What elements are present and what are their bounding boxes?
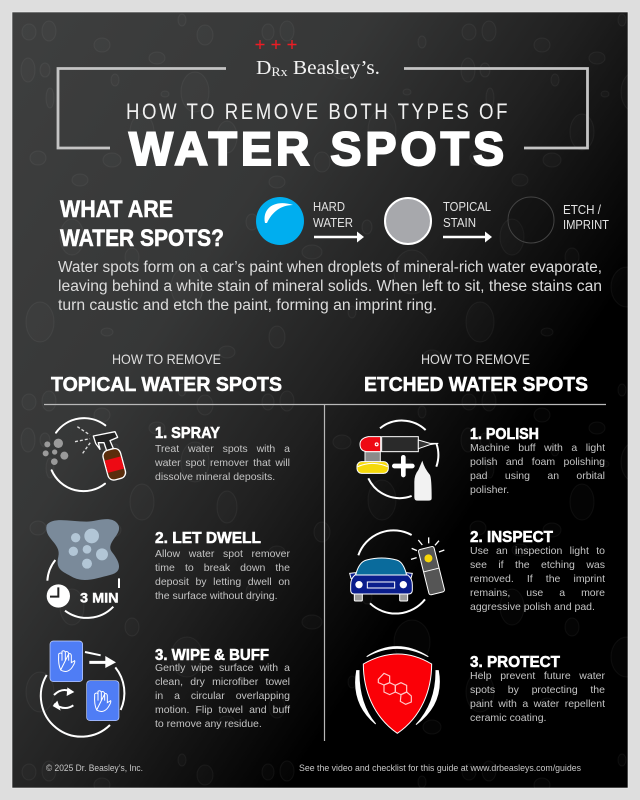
title bracket frame	[58, 68, 588, 148]
icon: polisher and polish bottle	[357, 421, 438, 501]
column heading: topical: HOW TO REMOVE	[112, 351, 221, 367]
step 1 spray text: dissolve mineral deposits.	[155, 471, 275, 483]
step 3 wipe and buff text: to remove any residue.	[155, 718, 262, 730]
step 2 dwell text: deposit by letting dwell on	[155, 576, 290, 588]
icon: topical stain	[385, 198, 431, 244]
label: hard water	[313, 199, 353, 230]
logo red crosses	[256, 40, 296, 49]
heading: what are water spots: WHAT ARE	[60, 196, 173, 223]
step 1 polish text	[470, 442, 605, 496]
step 1 polish text: polish and foam polishing	[470, 456, 605, 468]
step 3 protect text	[470, 670, 605, 724]
logo: Dr. Beasley's	[256, 40, 380, 79]
logo wordmark: D	[256, 57, 270, 79]
column heading: topical: TOPICAL WATER SPOTS	[51, 373, 282, 396]
step 2 inspect text: removed. If the imprint	[470, 573, 605, 585]
column heading: etched: ETCHED WATER SPOTS	[364, 373, 588, 396]
column heading: topical	[51, 351, 282, 396]
intro paragraph: leaving behind a white stain of mineral solids. When left to sit, these stains can	[58, 278, 602, 295]
label: etch imprint: IMPRINT	[563, 217, 609, 232]
step 2 inspect text: see if the etching was	[470, 559, 605, 571]
icon: etch imprint	[508, 197, 554, 243]
label: topical stain: STAIN	[443, 215, 476, 230]
title line 2: WATER SPOTS	[129, 122, 508, 175]
step 3 protect heading: 3. PROTECT	[470, 654, 560, 671]
step 1 polish heading: 1. POLISH	[470, 426, 539, 443]
step 3 protect text: Help prevent future water	[470, 670, 605, 682]
step 3 wipe and buff text: clean, dry microfiber towel	[155, 676, 290, 688]
icon: dwell stain with timer: 3 MIN	[80, 589, 119, 605]
label: topical stain	[443, 199, 491, 230]
step 2 inspect text	[470, 545, 605, 613]
icon: dwell stain with timer	[46, 519, 119, 618]
step 3 wipe and buff text: in a circular overlapping	[155, 690, 290, 702]
icon: spray bottle	[43, 418, 127, 491]
label: topical stain: TOPICAL	[443, 199, 491, 214]
step 1 polish text: pad using an orbital	[470, 470, 605, 482]
step 1 spray text: Treat water spots with a	[155, 443, 290, 455]
icon: hard water droplet	[256, 197, 304, 245]
intro paragraph	[58, 259, 602, 314]
logo wordmark: Beasley’s.	[288, 57, 380, 79]
step 3 wipe and buff text: Gently wipe surface with a	[155, 662, 290, 674]
step 2 dwell text: time to break down the	[155, 562, 290, 574]
label: etch imprint	[563, 202, 609, 232]
step 3 wipe and buff text	[155, 662, 290, 730]
arrow: hard water to stain	[314, 232, 364, 242]
label: etch imprint: ETCH /	[563, 202, 601, 217]
heading: what are water spots: WATER SPOTS?	[60, 225, 224, 252]
step 3 wipe and buff text: motion. Flip towel and buff	[155, 704, 290, 716]
step 3 protect text: spots by protecting the	[470, 684, 605, 696]
step 3 protect text: paint with a water repellent	[470, 698, 605, 710]
logo wordmark: Rx	[271, 64, 288, 79]
step 2 dwell text: Allow water spot remover	[155, 548, 290, 560]
heading: what are water spots	[60, 196, 224, 252]
footer copyright: © 2025 Dr. Beasley’s, Inc.	[46, 763, 143, 773]
step 2 dwell text: the surface without drying.	[155, 590, 278, 602]
intro paragraph: Water spots form on a car’s paint when droplets of mineral-rich water evaporate,	[58, 259, 602, 276]
step 2 inspect heading: 2. INSPECT	[470, 529, 553, 546]
intro paragraph: turn caustic and etch the paint, forming an imprint ring.	[58, 297, 437, 314]
arrow: stain to etch	[443, 232, 492, 242]
step 3 protect text: ceramic coating.	[470, 712, 546, 724]
step 1 polish text: Machine buff with a light	[470, 442, 605, 454]
step 1 spray text: water spot remover that will	[155, 457, 290, 469]
step 2 inspect text: remains, use a more	[470, 587, 605, 599]
step 1 spray heading: 1. SPRAY	[155, 425, 220, 442]
column heading: etched	[364, 351, 588, 396]
step 1 spray text	[155, 443, 290, 483]
label: hard water: WATER	[313, 215, 353, 230]
step 2 inspect text: aggressive polish and pad.	[470, 601, 595, 613]
title line 1: HOW TO REMOVE BOTH TYPES OF	[126, 99, 510, 124]
label: hard water: HARD	[313, 199, 345, 214]
step 2 inspect text: Use an inspection light to	[470, 545, 605, 557]
step 2 dwell text	[155, 548, 290, 602]
step 1 polish text: polisher.	[470, 484, 509, 496]
icon: ceramic shield	[356, 647, 439, 733]
step 2 dwell heading: 2. LET DWELL	[155, 530, 261, 547]
column heading: etched: HOW TO REMOVE	[421, 351, 530, 367]
icon: wipe and buff hands	[41, 641, 124, 737]
step 3 wipe and buff heading: 3. WIPE & BUFF	[155, 647, 269, 664]
footer guide link: See the video and checklist for this guide at www.drbeasleys.com/guides	[299, 763, 581, 773]
icon: car and inspection light	[350, 530, 445, 614]
